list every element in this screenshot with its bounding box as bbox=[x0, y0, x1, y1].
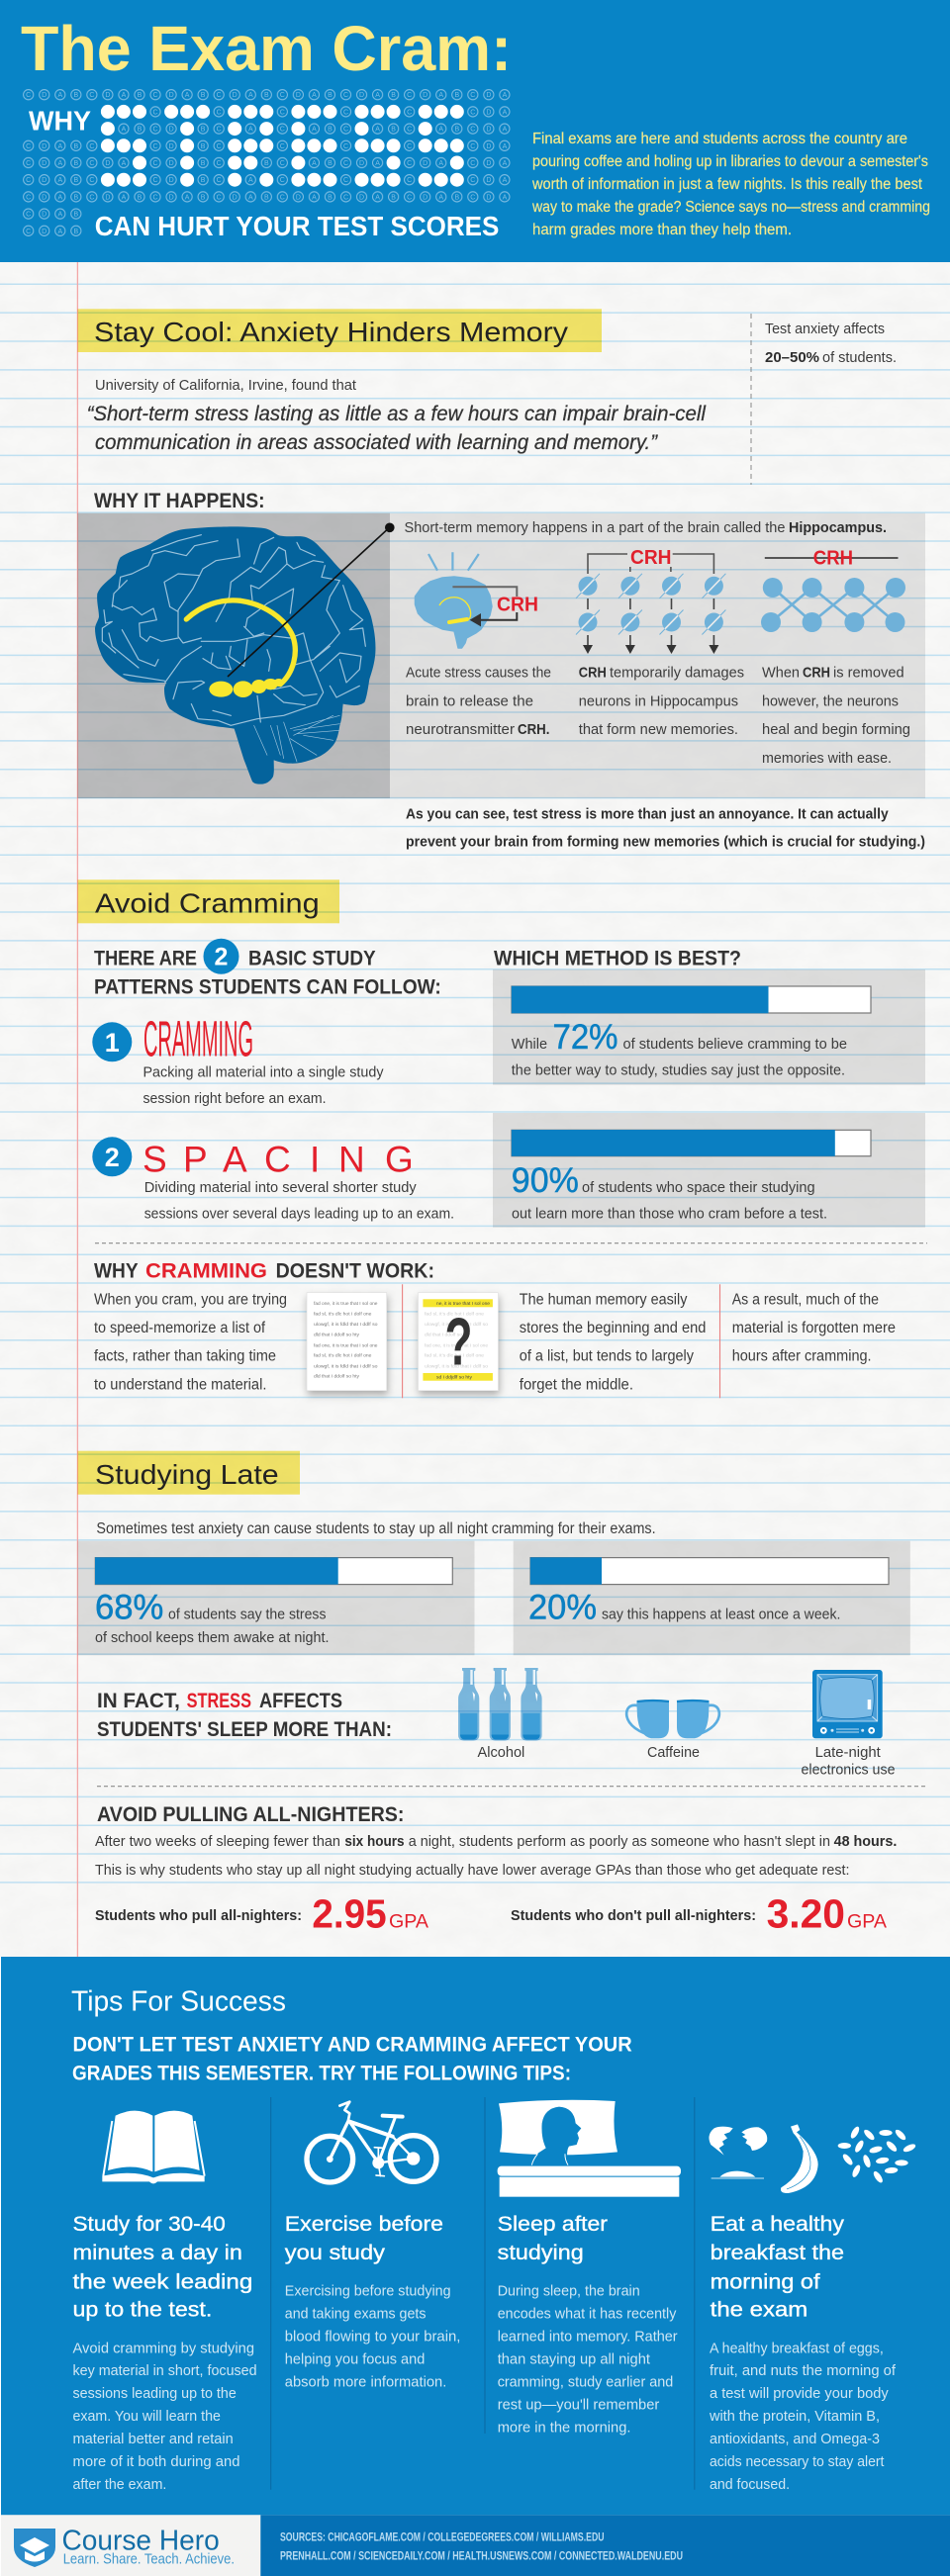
stat text: of students who space their studying bbox=[582, 1179, 815, 1196]
answer-sheet bubble grid spelling STRESS: CCCCCCDA bbox=[152, 109, 508, 116]
tip 3: sleep: more in the morning. bbox=[498, 2420, 631, 2437]
text: forgotten: As a result, much of the bbox=[732, 1291, 879, 1308]
paper background bbox=[0, 262, 950, 1957]
hippocampus bbox=[186, 600, 295, 697]
tip 2: exercise: Exercise before bbox=[285, 2213, 443, 2236]
text: CRH damages neurons bbox=[579, 664, 744, 738]
stat text: say this happens at least once a week. bbox=[602, 1607, 840, 1623]
text: neurons heal: memories with ease. bbox=[762, 750, 892, 767]
text: neurons heal: heal and begin forming bbox=[762, 721, 910, 738]
text: hippocampus: Hippocampus. bbox=[789, 519, 887, 536]
heading highlight: avoid cramming: Avoid Cramming bbox=[95, 888, 320, 919]
tip 3: sleep: studying bbox=[498, 2242, 584, 2264]
icon: CRH damages neurons bbox=[576, 547, 725, 654]
icon: coffee cups bbox=[626, 1701, 719, 1738]
text: sleep deprivation: 48 hours. bbox=[834, 1833, 897, 1850]
tip 4: breakfast: with the protein, Vitamin B, bbox=[709, 2408, 880, 2425]
icon: neurons heal without CRH bbox=[761, 548, 905, 632]
logo: Course Hero bbox=[14, 2525, 235, 2568]
tip 2: exercise: you study bbox=[285, 2242, 385, 2264]
panel: brain explanation bbox=[77, 513, 925, 798]
heading: stress affects sleep: AFFECTS bbox=[259, 1690, 342, 1712]
stat text bbox=[512, 1161, 827, 1223]
tip 3: sleep: than staying up all night bbox=[498, 2351, 651, 2368]
text: neurons heal: is removed bbox=[833, 664, 904, 681]
logo: Course Hero: Learn. Share. Teach. Achieve. bbox=[63, 2551, 235, 2568]
heading highlight: stay cool: Stay Cool: Anxiety Hinders Memory bbox=[94, 317, 568, 347]
heading: two basic study patterns: PATTERNS STUDENTS CAN FOLLOW: bbox=[94, 976, 441, 999]
stat text bbox=[95, 1589, 329, 1646]
text: sleep deprivation: After two weeks of sleeping fewer than bbox=[95, 1833, 340, 1850]
item: spacing bbox=[92, 1137, 454, 1223]
tip 4: breakfast: Eat a healthy bbox=[711, 2213, 845, 2236]
heading: two basic study patterns: BASIC STUDY bbox=[248, 948, 376, 970]
stat: 3.20 GPA: Students who don't pull all-nighters: bbox=[511, 1907, 756, 1924]
icon: forgotten middle page: ulowgf, it is fdld that I ddlf so bbox=[425, 1322, 489, 1327]
heading: tips: Tips For Success bbox=[71, 1985, 286, 2017]
tip 4: breakfast: and focused. bbox=[710, 2476, 790, 2493]
tip 4: breakfast bbox=[709, 2124, 916, 2493]
panel: 20 percent bbox=[514, 1541, 910, 1655]
quote: communication in areas associated with learning and memory.” bbox=[95, 431, 658, 454]
stat text: the better way to study, studies say just the opposite. bbox=[512, 1062, 845, 1079]
tip 1: study: Study for 30-40 bbox=[73, 2213, 226, 2236]
quote bbox=[87, 403, 707, 454]
stat note: test anxiety: Test anxiety affects bbox=[765, 321, 885, 337]
tip 1: study: more of it both during and bbox=[73, 2453, 239, 2470]
title: The Exam Cram: bbox=[21, 13, 512, 84]
subtitle: can hurt your test scores: CAN HURT YOUR TEST SCORES bbox=[95, 211, 499, 241]
tip 4: breakfast: acids necessary to stay alert bbox=[710, 2453, 885, 2470]
intro paragraph: pouring coffee and holing up in libraries to devour a semester's bbox=[532, 153, 928, 170]
stat text: While bbox=[512, 1036, 547, 1053]
answer-sheet bubble grid spelling STRESS: CDABCDACDBCBCABCDACDACDA bbox=[26, 160, 508, 167]
text: sleep deprivation bbox=[95, 1833, 897, 1879]
tip 3: sleep: cramming, study earlier and bbox=[498, 2374, 673, 2391]
tip 1: study: key material in short, focused bbox=[73, 2362, 257, 2379]
tip 1: study: Avoid cramming by studying bbox=[73, 2340, 254, 2356]
text: forgotten: material is forgotten mere bbox=[732, 1320, 896, 1336]
item: cramming: 1 bbox=[105, 1028, 120, 1058]
icon: television bbox=[812, 1670, 883, 1738]
answer-sheet bubble grid spelling STRESS: CDAB bbox=[26, 229, 78, 235]
section: stay cool bbox=[77, 309, 897, 512]
item: cramming: Packing all material into a single study bbox=[142, 1063, 384, 1080]
stat text: of students say the stress bbox=[168, 1607, 327, 1623]
stat: 2.95 GPA bbox=[95, 1890, 428, 1936]
icon: CRH damages neurons: CRH bbox=[630, 547, 671, 569]
answer-sheet bubble grid spelling STRESS: CDABCCDBCACCCCDA bbox=[26, 177, 508, 184]
tip 1: study: material better and retain bbox=[73, 2431, 234, 2447]
text: speed memorize: When you cram, you are trying bbox=[94, 1291, 287, 1308]
text: acute stress: CRH. bbox=[518, 721, 549, 738]
text: sleep deprivation: six hours bbox=[344, 1833, 404, 1850]
text: CRH damages neurons: neurons in Hippocampus bbox=[579, 692, 738, 709]
heading highlight: stay cool bbox=[77, 309, 602, 352]
source line: University of California, Irvine, found that bbox=[95, 377, 357, 394]
tip 1: study: exam. You will learn the bbox=[73, 2408, 221, 2425]
icon: sleeping head on pillow bbox=[498, 2100, 681, 2197]
panel: 72 percent bbox=[493, 969, 925, 1085]
icon: study list page bbox=[307, 1293, 387, 1391]
tip 4: breakfast: the exam bbox=[711, 2299, 808, 2322]
text: CRH damages neurons: CRH bbox=[579, 664, 607, 681]
intro paragraph: worth of information in just a few nights. Is this really the best bbox=[531, 176, 923, 193]
icon: brain with hippocampus bbox=[95, 526, 375, 784]
text: speed memorize: to understand the material. bbox=[94, 1377, 266, 1394]
subtitle: why: WHY bbox=[29, 106, 91, 137]
icon: neurons heal without CRH: CRH bbox=[813, 548, 853, 570]
text: speed memorize: to speed-memorize a list of bbox=[94, 1320, 266, 1336]
icon: forgotten middle page: dld that I ddolf so hty bbox=[425, 1333, 471, 1337]
subheading: DON'T LET TEST ANXIETY AND CRAMMING AFFECT YOUR bbox=[73, 2033, 632, 2056]
icon: forgotten middle page: ne, it is true that I sol one bbox=[436, 1301, 491, 1306]
tip 3: sleep: During sleep, the brain bbox=[498, 2283, 640, 2300]
tip 1: study: sessions leading up to the bbox=[73, 2385, 237, 2402]
icon labels: electronics use bbox=[802, 1761, 895, 1778]
heading highlight: studying late bbox=[77, 1451, 300, 1495]
text: neurons heal bbox=[762, 664, 910, 767]
text: acute stress: brain to release the bbox=[406, 692, 533, 709]
icon labels bbox=[477, 1744, 895, 1778]
answer-sheet bubble grid spelling STRESS: CDABCDABCDABCDABCDABCDABCDABCDA bbox=[26, 194, 508, 201]
icon: study list page: fad sl, it's dlc hot I dolf one bbox=[314, 1353, 372, 1358]
text: CRH damages neurons: that form new memories. bbox=[579, 721, 738, 738]
icon: brain releases CRH: CRH bbox=[497, 594, 538, 615]
sources: SOURCES: CHICAGOFLAME.COM / COLLEGEDEGREES.COM / WILLIAMS.EDU bbox=[280, 2531, 604, 2543]
text: forgotten: hours after cramming. bbox=[732, 1348, 872, 1365]
icon: study list page: ulowgf, it is fdld that I ddlf so bbox=[314, 1322, 378, 1327]
item: cramming: CRAMMING bbox=[143, 1010, 253, 1066]
logo: Course Hero: Course Hero bbox=[61, 2525, 220, 2556]
intro paragraph: harm grades more than they help them. bbox=[532, 222, 792, 238]
text: sleep deprivation: This is why students who stay up all night studying actually have lower average GPAs than those who get adequate rest: bbox=[95, 1862, 849, 1879]
stat: 2.95 GPA: 2.95 bbox=[312, 1890, 387, 1936]
item: spacing: SPACING bbox=[142, 1139, 414, 1179]
item: spacing: Dividing material into several shorter study bbox=[144, 1179, 417, 1196]
footer bbox=[1, 2515, 950, 2576]
conclusion text bbox=[406, 805, 925, 851]
tip 3: sleep: encodes what it has recently bbox=[498, 2306, 677, 2323]
panel: 68 percent bbox=[77, 1541, 475, 1655]
text: human memory: stores the beginning and end bbox=[520, 1320, 706, 1336]
stat: 2.95 GPA: Students who pull all-nighters: bbox=[95, 1907, 302, 1924]
icon: forgotten middle page bbox=[418, 1293, 498, 1391]
icon labels: Alcohol bbox=[477, 1744, 524, 1761]
stat text: 90% bbox=[512, 1161, 579, 1200]
heading: avoid all-nighters: AVOID PULLING ALL-NIGHTERS: bbox=[97, 1803, 404, 1826]
tip 4: breakfast: breakfast the bbox=[711, 2242, 844, 2264]
icon: forgotten middle page: fad one, it is true that I sol one bbox=[425, 1342, 489, 1347]
subheading bbox=[72, 2033, 632, 2084]
text: sleep deprivation: a night, students perform as poorly as someone who hasn't slept in bbox=[409, 1833, 830, 1850]
icon: bicycle bbox=[307, 2102, 436, 2182]
tip 1: study: the week leading bbox=[73, 2270, 252, 2293]
icon: forgotten middle page: ? bbox=[445, 1304, 473, 1379]
stat note: test anxiety bbox=[751, 314, 897, 485]
tip 3: sleep: learned into memory. Rather bbox=[498, 2329, 678, 2346]
heading: stress affects sleep: STRESS bbox=[187, 1690, 251, 1712]
stat note: test anxiety: of students. bbox=[822, 349, 897, 366]
icon labels: Late-night bbox=[815, 1744, 882, 1761]
text: human memory: The human memory easily bbox=[520, 1291, 688, 1308]
answer-sheet bubble grid spelling STRESS bbox=[21, 86, 513, 239]
icon: brain releases CRH bbox=[416, 552, 538, 648]
stat text: of students believe cramming to be bbox=[623, 1036, 847, 1053]
tip 2: exercise: absorb more information. bbox=[285, 2374, 446, 2391]
stat text: 72% bbox=[552, 1018, 618, 1057]
heading: stress affects sleep: STUDENTS' SLEEP MORE THAN: bbox=[97, 1718, 392, 1741]
answer-sheet bubble grid spelling STRESS: ABCDBCACABCABCABCDA bbox=[122, 127, 508, 134]
icon: study list page: dld that I ddolf so hty bbox=[314, 1333, 360, 1337]
tip 4: breakfast: antioxidants, and Omega-3 bbox=[710, 2431, 880, 2447]
item: cramming: session right before an exam. bbox=[142, 1090, 327, 1107]
tip 2: exercise: helping you focus and bbox=[285, 2351, 425, 2368]
heading: stress affects sleep bbox=[97, 1690, 392, 1741]
icon: study list page: fad one, it is true that I sol one bbox=[314, 1301, 378, 1306]
panel: 90 percent bbox=[493, 1113, 925, 1228]
text: forgotten bbox=[732, 1291, 896, 1365]
stat: 3.20 GPA: GPA bbox=[847, 1911, 887, 1932]
tip 1: study: minutes a day in bbox=[73, 2242, 242, 2264]
heading highlight: avoid cramming bbox=[77, 879, 339, 923]
heading: two basic study patterns bbox=[94, 939, 441, 999]
tip 4: breakfast: fruit, and nuts the morning of bbox=[710, 2362, 897, 2379]
heading: two basic study patterns: 2 bbox=[215, 944, 228, 971]
sources: PRENHALL.COM / SCIENCEDAILY.COM / HEALTH.USNEWS.COM / CONNECTED.WALDENU.EDU bbox=[280, 2550, 683, 2562]
text: speed memorize bbox=[94, 1291, 287, 1394]
text: acute stress: neurotransmitter bbox=[406, 721, 515, 738]
tip 3: sleep: Sleep after bbox=[498, 2213, 608, 2236]
text: speed memorize: facts, rather than taking time bbox=[94, 1348, 276, 1365]
stat: 3.20 GPA bbox=[511, 1890, 887, 1936]
icon labels: Caffeine bbox=[647, 1744, 700, 1761]
text: CRH damages neurons: temporarily damages bbox=[610, 664, 744, 681]
conclusion text: As you can see, test stress is more than just an annoyance. It can actually bbox=[406, 805, 889, 822]
intro text: Sometimes test anxiety can cause students to stay up all night cramming for their exams. bbox=[96, 1520, 656, 1537]
text: neurons heal: CRH bbox=[803, 664, 830, 681]
stat text: 68% bbox=[95, 1589, 163, 1627]
icon: walnut, egg, banana, oats bbox=[709, 2124, 916, 2193]
quote: “Short-term stress lasting as little as a few hours can impair brain-cell bbox=[87, 403, 707, 425]
answer-sheet bubble grid spelling STRESS: CDABCDABCDABCDABCDABCDABCDABCDA bbox=[26, 92, 508, 99]
tip 3: sleep bbox=[498, 2100, 681, 2437]
item: cramming bbox=[92, 1010, 384, 1107]
section: studying late bbox=[77, 1451, 927, 1936]
answer-sheet bubble grid spelling STRESS: CDAB bbox=[26, 212, 78, 219]
heading: why cramming doesn't work bbox=[94, 1260, 434, 1283]
conclusion text: prevent your brain from forming new memories (which is crucial for studying.) bbox=[406, 834, 925, 851]
stat: 2.95 GPA: GPA bbox=[389, 1911, 428, 1932]
tip 4: breakfast: morning of bbox=[711, 2270, 820, 2293]
tip 4: breakfast: a test will provide your body bbox=[710, 2385, 889, 2402]
stat text bbox=[512, 1018, 847, 1079]
heading: why cramming doesn't work: WHY bbox=[94, 1260, 139, 1283]
panel: header bbox=[0, 0, 950, 262]
icon: forgotten middle page: ulowgf, it is fdld that I ddlf so bbox=[425, 1363, 489, 1368]
stat: 3.20 GPA: 3.20 bbox=[767, 1890, 845, 1936]
tip 3: sleep: rest up—you'll remember bbox=[498, 2397, 659, 2414]
icon: alcohol bottles bbox=[458, 1668, 542, 1741]
progress bar: 20% bbox=[530, 1557, 889, 1585]
stat text: out learn more than those who cram before a test. bbox=[512, 1206, 827, 1223]
subheading: GRADES THIS SEMESTER. TRY THE FOLLOWING TIPS: bbox=[72, 2062, 571, 2084]
icon: study list page: ulowgf, it is fdld that I ddlf so bbox=[314, 1363, 378, 1368]
text: acute stress: Acute stress causes the bbox=[406, 664, 551, 681]
tip 4: breakfast: A healthy breakfast of eggs, bbox=[710, 2340, 884, 2356]
tip 2: exercise: and taking exams gets bbox=[285, 2306, 426, 2323]
text: human memory bbox=[520, 1291, 706, 1394]
text: neurons heal: When bbox=[762, 664, 800, 681]
icon: study list page: fad sl, it's dlc hot I dolf one bbox=[314, 1312, 372, 1317]
progress bar: 68% bbox=[95, 1557, 452, 1585]
pointer line bbox=[228, 522, 395, 677]
text: acute stress bbox=[406, 664, 551, 738]
tip 2: exercise: blood flowing to your brain, bbox=[285, 2329, 460, 2346]
stat note: test anxiety: 20–50% bbox=[765, 349, 819, 366]
heading: why cramming doesn't work: CRAMMING bbox=[145, 1260, 267, 1283]
sources bbox=[280, 2531, 683, 2562]
text: neurons heal: however, the neurons bbox=[762, 692, 899, 709]
item: spacing: 2 bbox=[105, 1143, 120, 1172]
intro paragraph bbox=[531, 131, 930, 238]
tip 1: study: up to the test. bbox=[73, 2299, 212, 2322]
tip 1: study bbox=[73, 2111, 257, 2493]
tip 1: study: after the exam. bbox=[73, 2476, 166, 2493]
stat text: of school keeps them awake at night. bbox=[95, 1629, 329, 1646]
heading: which method: WHICH METHOD IS BEST? bbox=[494, 948, 741, 970]
heading: two basic study patterns: THERE ARE bbox=[94, 948, 197, 970]
item: spacing: sessions over several days leading up to an exam. bbox=[144, 1206, 454, 1223]
answer-sheet bubble grid spelling STRESS: CDABCCDBCCCCCDA bbox=[26, 143, 508, 150]
stat text bbox=[528, 1589, 840, 1627]
text: human memory: forget the middle. bbox=[520, 1377, 633, 1394]
icon: forgotten middle page: fad sl, it's dlc hot I dolf one bbox=[425, 1353, 485, 1358]
heading: stress affects sleep: IN FACT, bbox=[97, 1690, 180, 1712]
icon: study list page: fad one, it is true that I sol one bbox=[314, 1342, 378, 1347]
heading: why it happens: WHY IT HAPPENS: bbox=[94, 490, 265, 512]
progress bar: 90% bbox=[512, 1130, 871, 1156]
icon: study list page: dld that I ddolf so hty bbox=[314, 1374, 360, 1379]
section: avoid cramming bbox=[77, 879, 927, 1398]
icon: forgotten middle page: sd I ddjdlf so hty bbox=[436, 1374, 473, 1379]
heading: why cramming doesn't work: DOESN'T WORK: bbox=[276, 1260, 434, 1283]
stat text: 20% bbox=[528, 1589, 597, 1627]
intro paragraph: Final exams are here and students across the country are bbox=[532, 131, 907, 147]
tip 2: exercise bbox=[285, 2102, 460, 2391]
progress bar: 72% bbox=[512, 986, 871, 1013]
text: human memory: of a list, but tends to largely bbox=[520, 1348, 694, 1365]
icon: open book bbox=[102, 2111, 205, 2183]
text: hippocampus: Short-term memory happens in a part of the brain called the bbox=[404, 519, 786, 536]
icon: forgotten middle page: fad sl, it's dlc hot I dolf one bbox=[425, 1312, 485, 1317]
heading highlight: studying late: Studying Late bbox=[95, 1459, 279, 1490]
tip 2: exercise: Exercising before studying bbox=[285, 2283, 451, 2300]
panel: tips for success bbox=[0, 1957, 950, 2576]
